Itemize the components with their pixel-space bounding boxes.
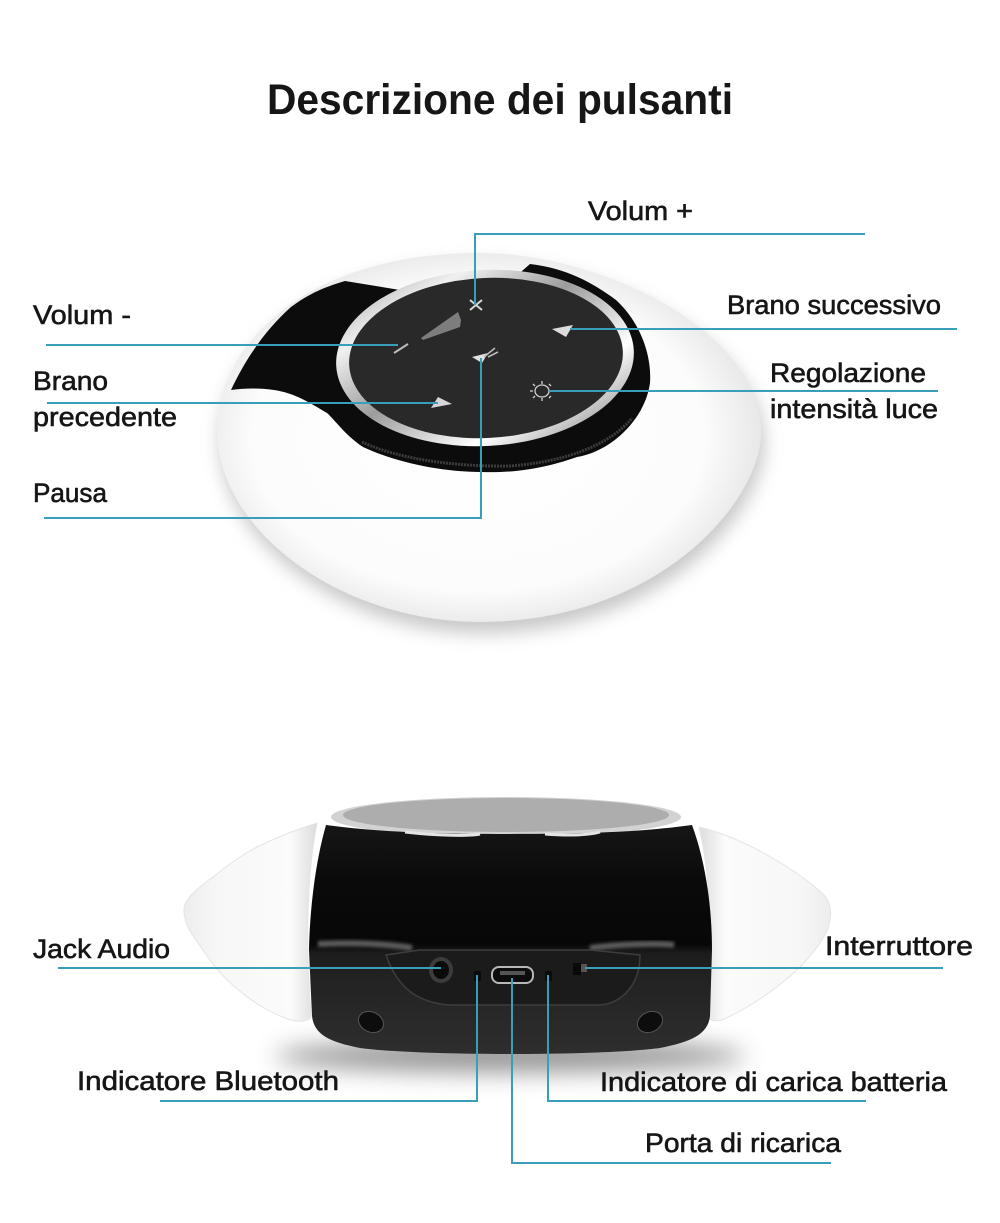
callout: Volum +: Volum + bbox=[588, 196, 693, 226]
right screw hole bbox=[634, 1007, 666, 1037]
callout: Brano precedente: precedente bbox=[33, 402, 177, 432]
callout: Brano precedente: Brano bbox=[33, 366, 108, 396]
charge LED bbox=[545, 971, 552, 981]
white shell bbox=[217, 253, 761, 622]
black top cover bbox=[231, 264, 650, 472]
icon: minus bbox=[394, 344, 408, 353]
callout: Indicatore Bluetooth: Indicatore Bluetooth bbox=[77, 1066, 339, 1096]
soft shadow hugging the shell bbox=[220, 264, 764, 633]
bluetooth LED bbox=[474, 971, 481, 981]
callout: Volum -: Volum - bbox=[33, 300, 131, 330]
port recess bbox=[386, 950, 640, 1005]
callout: Porta di ricarica bbox=[512, 978, 842, 1163]
micro USB port bbox=[492, 967, 533, 983]
black control face bbox=[345, 271, 627, 445]
callout: Indicatore di carica batteria bbox=[548, 975, 948, 1101]
callout: Jack Audio: Jack Audio bbox=[33, 934, 170, 964]
callout: Volum + bbox=[475, 196, 865, 305]
icon: previous arrow bbox=[431, 397, 452, 408]
power switch bbox=[573, 963, 587, 975]
callout: Brano successivo: Brano successivo bbox=[727, 290, 941, 320]
chrome ring bbox=[332, 262, 638, 454]
audio jack bbox=[429, 957, 453, 983]
left ridge highlight bbox=[318, 943, 412, 948]
icon: plus bbox=[470, 300, 482, 310]
callout: Indicatore di carica batteria: Indicatore di carica batteria bbox=[600, 1067, 948, 1097]
icon: volume bars bbox=[421, 312, 461, 340]
callout: Regolazione intensità luce: intensità luce bbox=[770, 394, 938, 424]
chrome highlights bbox=[405, 832, 600, 835]
callout: Interruttore: Interruttore bbox=[825, 931, 973, 961]
top disc bbox=[331, 797, 681, 837]
left wing bbox=[184, 823, 317, 1021]
callout: Pausa: Pausa bbox=[33, 478, 108, 508]
icon: next arrow bbox=[552, 325, 573, 337]
callout: Indicatore Bluetooth bbox=[77, 975, 477, 1101]
right wing bbox=[699, 827, 831, 1021]
callout: Brano precedente bbox=[33, 366, 438, 432]
icon: brightness sun bbox=[530, 381, 554, 401]
icon: play pause bbox=[472, 348, 498, 363]
right ridge highlight bbox=[590, 944, 674, 948]
callout: Regolazione intensità luce: Regolazione bbox=[770, 358, 926, 388]
callout: Regolazione intensità luce bbox=[550, 358, 938, 424]
speaker grille edge bbox=[362, 418, 632, 466]
product photo: speaker top view bbox=[217, 253, 764, 633]
black rear body bbox=[309, 825, 712, 1054]
callout: Pausa bbox=[33, 358, 481, 518]
callout: Porta di ricarica: Porta di ricarica bbox=[645, 1128, 842, 1158]
left screw hole bbox=[355, 1007, 387, 1037]
product photo: speaker rear view bbox=[184, 797, 831, 1072]
title: Descrizione dei pulsanti bbox=[267, 76, 733, 124]
